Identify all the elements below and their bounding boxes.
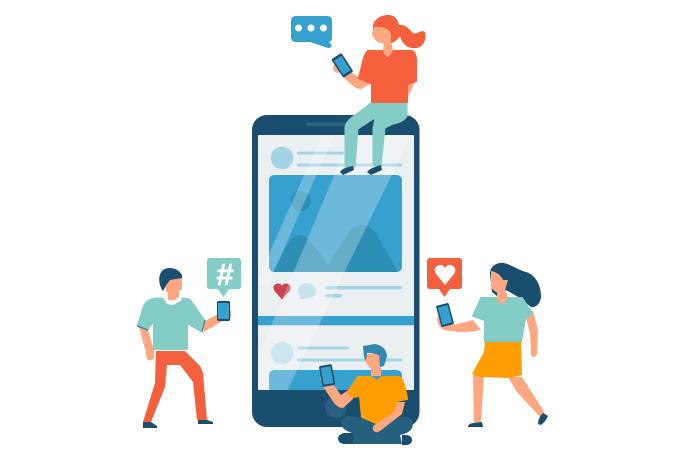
- shirt: [359, 51, 416, 102]
- right arm: [525, 311, 538, 357]
- right arm: [394, 80, 416, 114]
- right arm: [203, 310, 231, 332]
- legs: [473, 375, 484, 423]
- divider bar: [258, 316, 414, 325]
- post 1 action lines: [325, 286, 402, 298]
- handheld phone: [217, 301, 230, 321]
- character: woman sitting on phone: [331, 15, 426, 175]
- face: [165, 277, 182, 292]
- post 1 text lines: [297, 152, 402, 166]
- hair: [159, 268, 182, 291]
- right arm: [373, 402, 405, 432]
- speech bubble: dots: [291, 16, 332, 48]
- shirt: [138, 298, 204, 349]
- face: [372, 27, 391, 43]
- character: woman with heart: [427, 258, 548, 427]
- shoes: [468, 422, 483, 427]
- phone: [240, 115, 420, 427]
- post 2 avatar: [271, 342, 293, 364]
- collar: [162, 296, 182, 305]
- hair: [490, 263, 541, 307]
- shirt: [473, 298, 532, 342]
- pants: [143, 351, 207, 422]
- hashtag bubble: #: [216, 257, 234, 292]
- face: [491, 271, 508, 293]
- hand: [333, 63, 343, 73]
- sun: [291, 191, 311, 211]
- phone bottom circle: [325, 396, 347, 418]
- character: man with hashtag: [137, 257, 241, 428]
- heart icon: [273, 283, 291, 300]
- neck: [497, 290, 508, 304]
- legs: [345, 102, 407, 167]
- phone screen: [258, 135, 414, 390]
- comment icon: [298, 283, 316, 300]
- sleeve trims: [137, 320, 205, 332]
- neck: [168, 288, 179, 300]
- illustration: [136, 15, 548, 445]
- face: [366, 354, 380, 369]
- post 1 image: [269, 175, 402, 272]
- mountains: [272, 225, 398, 272]
- screen glare: [258, 152, 397, 390]
- post 2 image: [269, 370, 402, 390]
- post 2 text lines: [297, 346, 402, 362]
- legs: [341, 416, 413, 444]
- neck: [371, 364, 381, 376]
- phone speaker: [306, 122, 356, 126]
- post 1 avatar: [271, 147, 293, 169]
- heart bubble: [427, 258, 462, 297]
- left arm: [139, 327, 154, 360]
- left arm: [344, 70, 370, 89]
- handheld phone: [319, 364, 335, 387]
- arm holding phone: [320, 372, 353, 408]
- hair: [373, 15, 426, 48]
- hair: [363, 344, 387, 367]
- shoes: [340, 166, 354, 175]
- handheld phone: [436, 303, 454, 327]
- hashtag bubble: [207, 257, 241, 297]
- shoes: [338, 433, 412, 445]
- handheld phone: [331, 53, 353, 78]
- shoes: [143, 422, 157, 428]
- character: man sitting cross-legged: [319, 344, 413, 445]
- neck: [383, 40, 393, 57]
- skirt: [472, 342, 522, 378]
- shirt: [348, 377, 407, 424]
- left arm: [437, 312, 481, 332]
